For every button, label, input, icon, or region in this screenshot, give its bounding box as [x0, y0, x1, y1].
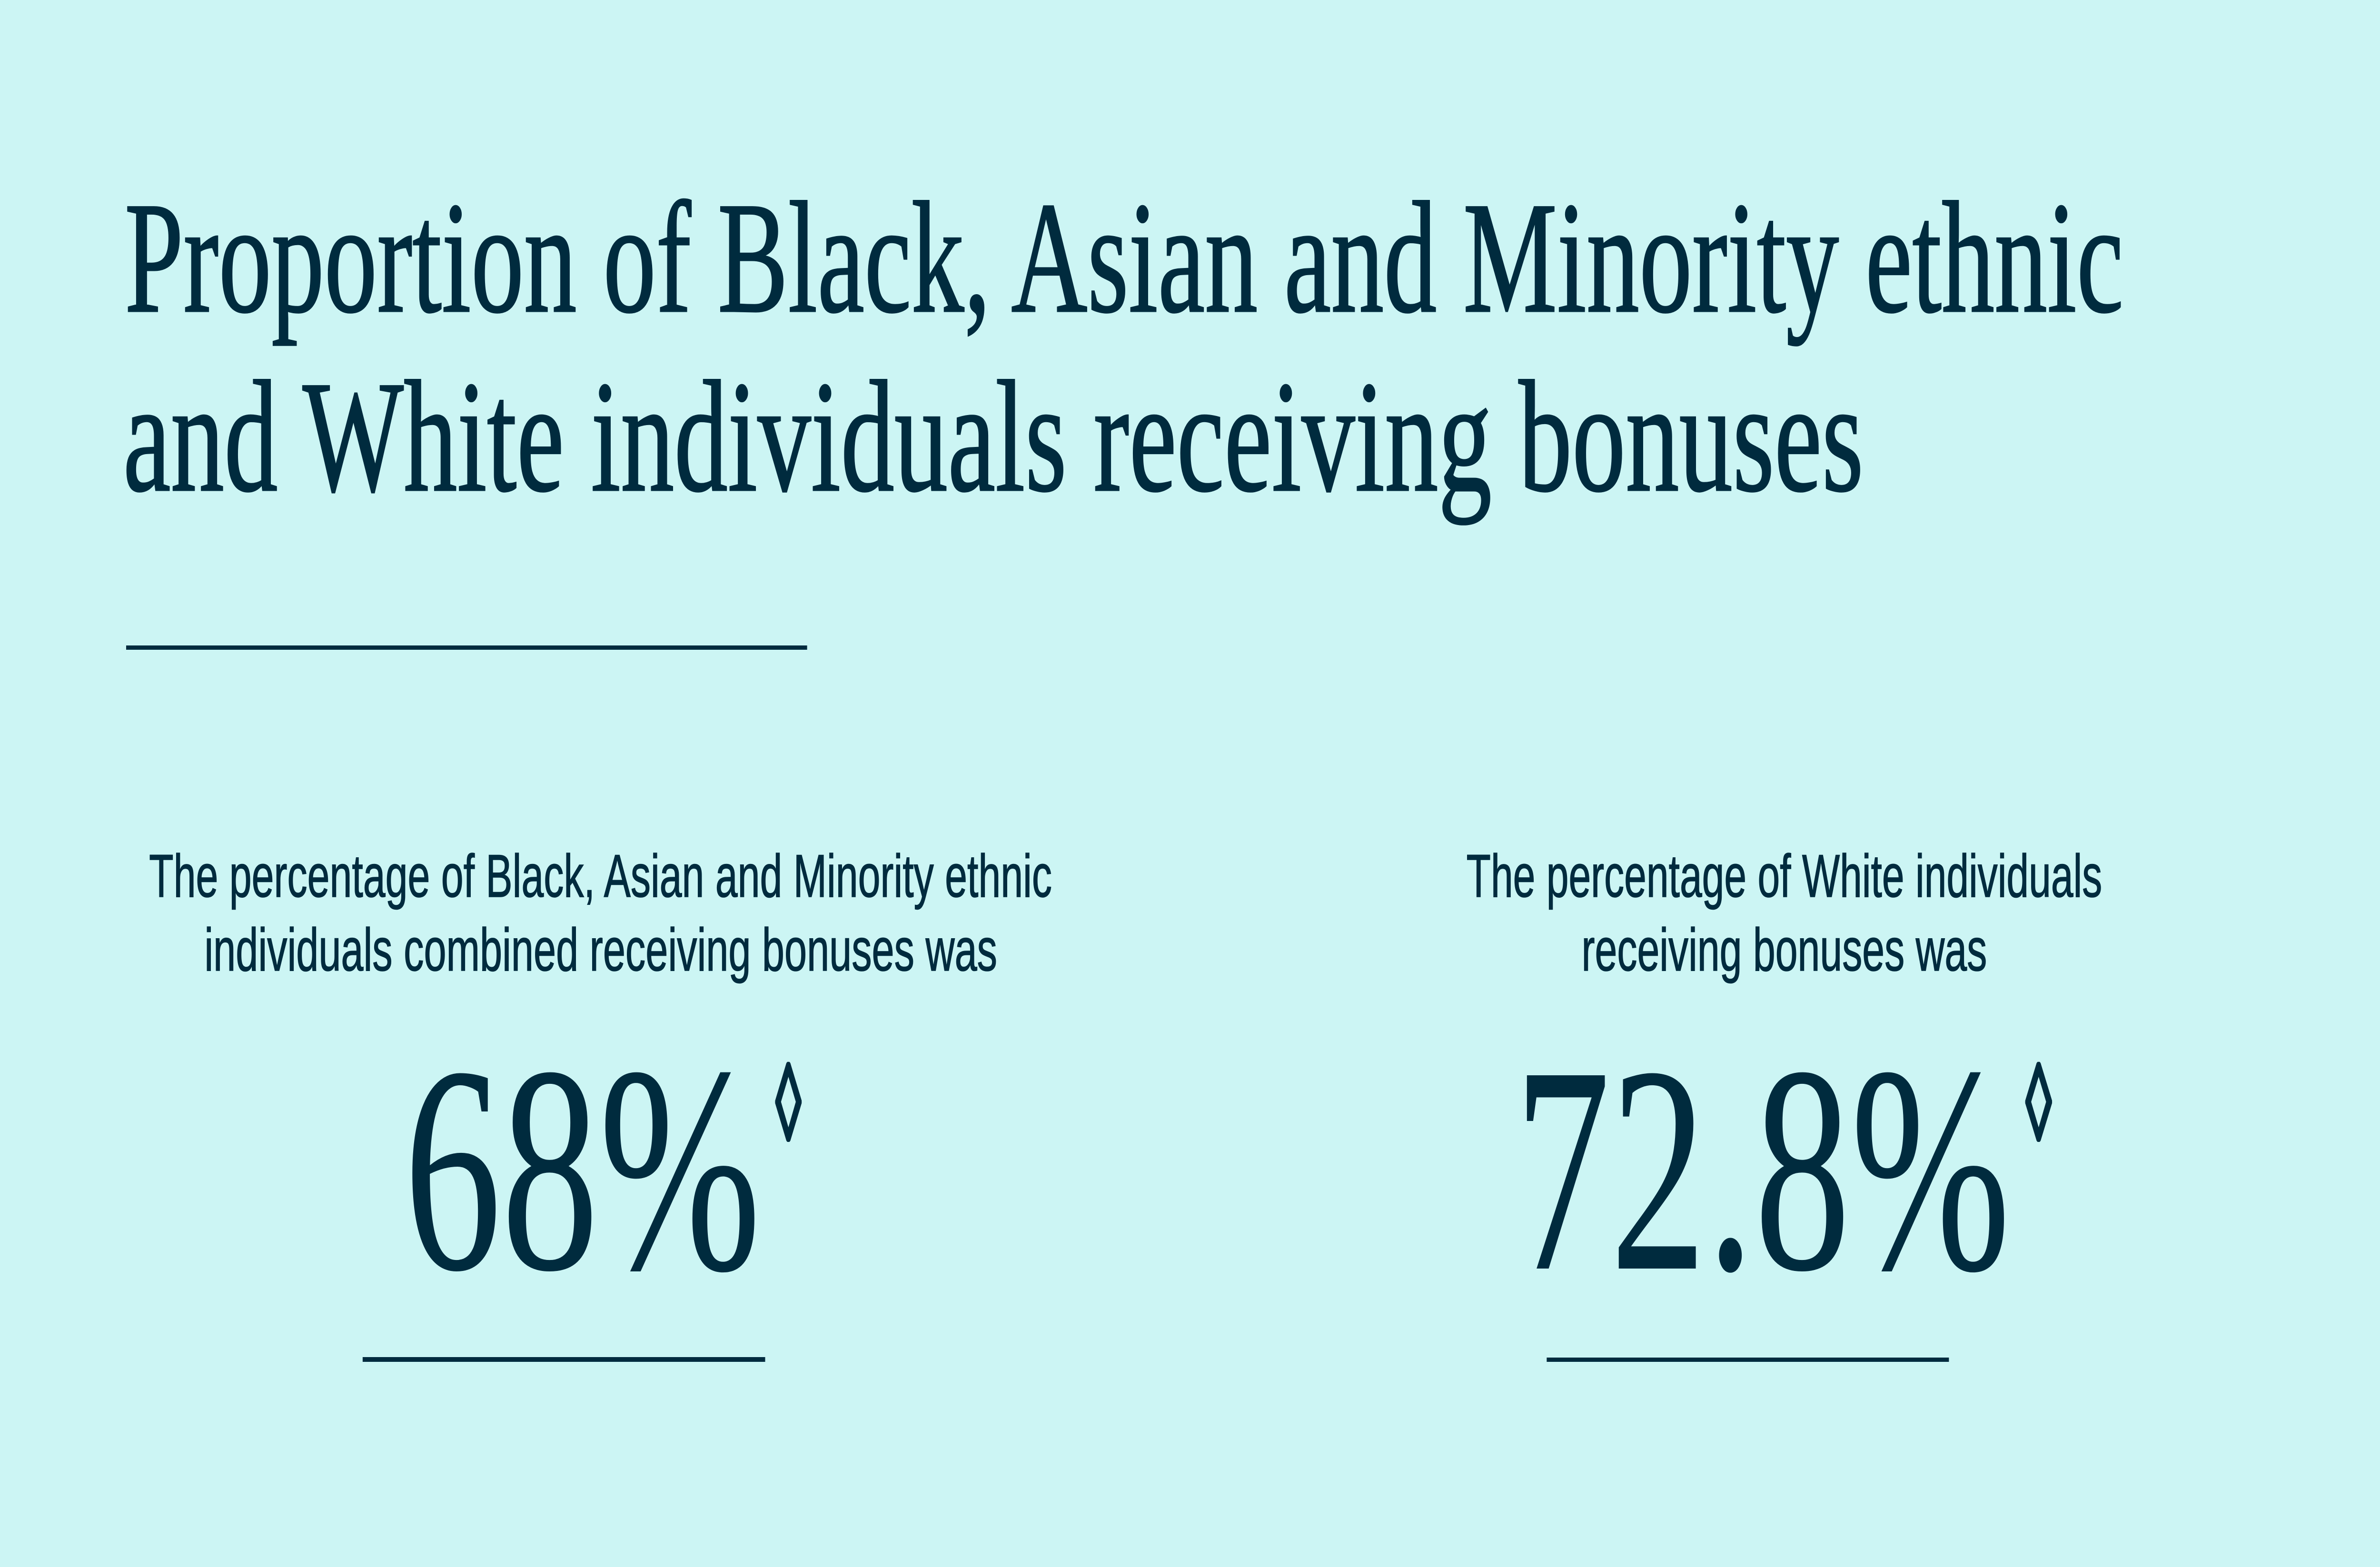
description: White: The percentage of White individuals — [1467, 843, 2102, 910]
description: Black, Asian and Minority ethnic — [149, 843, 1052, 984]
description: Black, Asian and Minority ethnic: The percentage of Black, Asian and Minority ethnic — [149, 843, 1052, 910]
title: Proportion of Black, Asian and Minority ethnic — [125, 170, 2123, 346]
footnote marker: diamond: ◊ — [2026, 1044, 2052, 1163]
title: and White individuals receiving bonuses — [123, 349, 1864, 525]
statistic: 68%: 68% — [404, 1005, 761, 1332]
description: White: receiving bonuses was — [1581, 916, 1987, 984]
footnote marker: diamond: ◊ — [776, 1044, 801, 1163]
panel: White bonus percentage — [1467, 843, 2102, 1362]
statistic: 72.8%: 72.8% — [1514, 1005, 2011, 1332]
statistic underline — [1547, 1358, 1949, 1362]
description: White — [1467, 843, 2102, 984]
panel: Black, Asian and Minority ethnic bonus percentage — [149, 843, 1052, 1362]
description: Black, Asian and Minority ethnic: individuals combined receiving bonuses was — [204, 916, 997, 984]
title — [123, 170, 2123, 525]
title underline — [126, 645, 807, 650]
statistic underline — [363, 1357, 765, 1362]
